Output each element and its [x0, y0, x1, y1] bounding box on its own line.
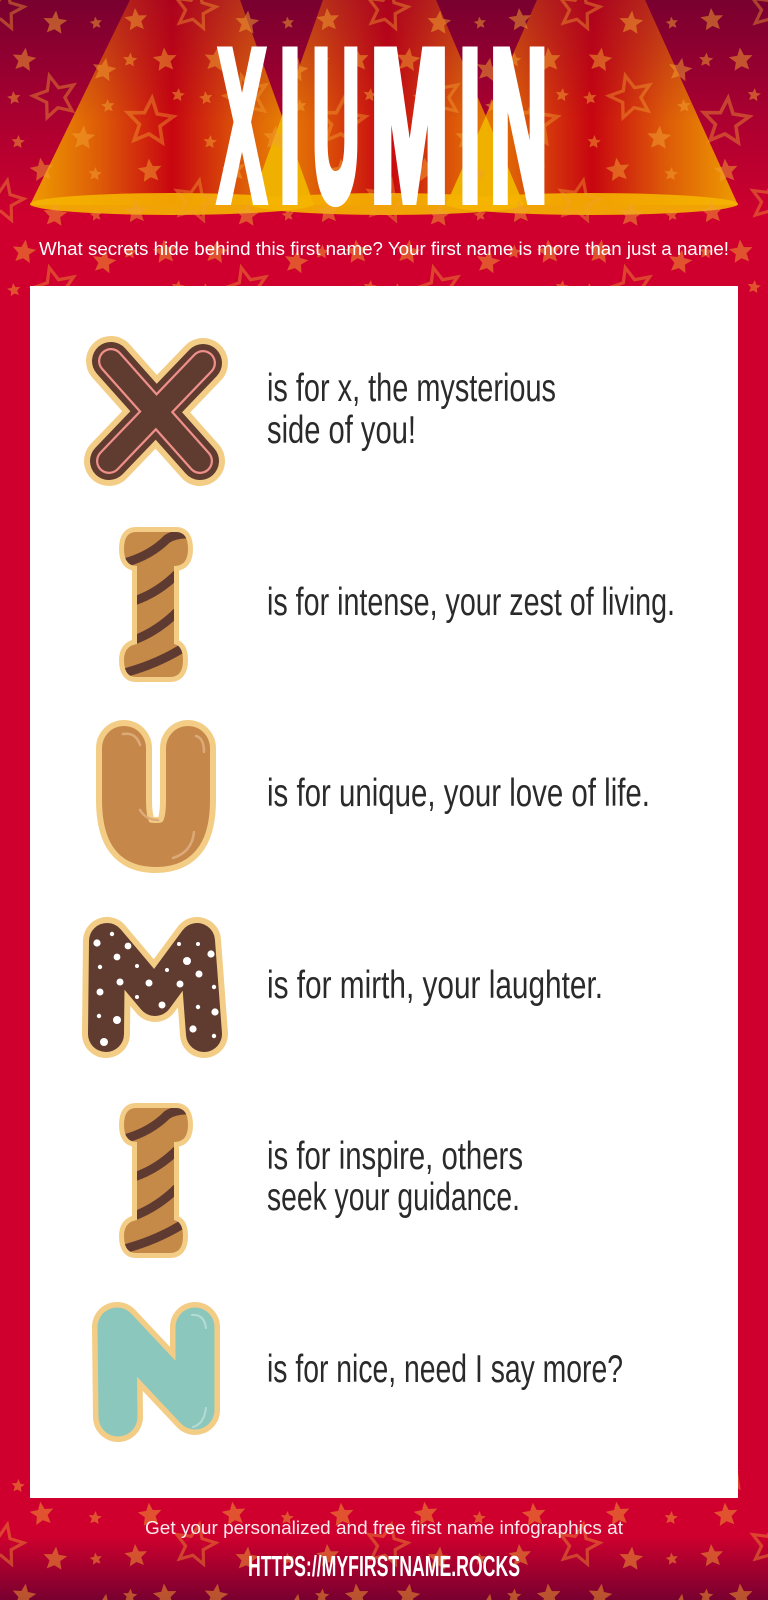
- title: I: [280, 7, 300, 245]
- star pattern top: [0, 0, 768, 304]
- row: M: [93, 932, 603, 1046]
- text: X line: is for x, the mysterious: [267, 367, 556, 410]
- text: U line: is for unique, your love of life.: [267, 772, 650, 815]
- icon: cookie I: [124, 532, 192, 677]
- infographic canvas: N: [490, 7, 548, 245]
- row: N: [117, 1315, 623, 1427]
- row: X: [109, 361, 556, 461]
- subtitle: What secrets hide behind this first name? Your first name is more than just a name!: [39, 238, 729, 259]
- icon: cookie N: [117, 1315, 206, 1427]
- title: U: [312, 7, 360, 245]
- icon: cookie X: [109, 361, 203, 461]
- title: M: [370, 7, 448, 245]
- text: I second line: seek your guidance.: [267, 1176, 520, 1219]
- text: M line: is for mirth, your laughter.: [267, 964, 603, 1007]
- text: N line: is for nice, need I say more?: [267, 1348, 623, 1391]
- row: I: [124, 532, 675, 677]
- panel: letters: [30, 286, 738, 1498]
- spotlights: [30, 0, 738, 215]
- title: X: [218, 7, 266, 245]
- text: X line: side of you!: [267, 409, 416, 452]
- row: U: [123, 734, 650, 858]
- text: I second line: is for inspire, others: [267, 1135, 523, 1178]
- star pattern bottom: [0, 1470, 768, 1600]
- text: I second line: [267, 1135, 523, 1219]
- text: X line: [267, 367, 556, 452]
- footer text: Get your personalized and free first name infographics at: [145, 1517, 623, 1538]
- icon: cookie I second: [124, 1108, 192, 1253]
- row: I second: [124, 1108, 523, 1253]
- title: I: [460, 7, 480, 245]
- icon: cookie M: [93, 932, 219, 1046]
- icon: cookie U: [123, 734, 204, 858]
- footer url: HTTPS://MYFIRSTNAME.ROCKS: [248, 1551, 520, 1583]
